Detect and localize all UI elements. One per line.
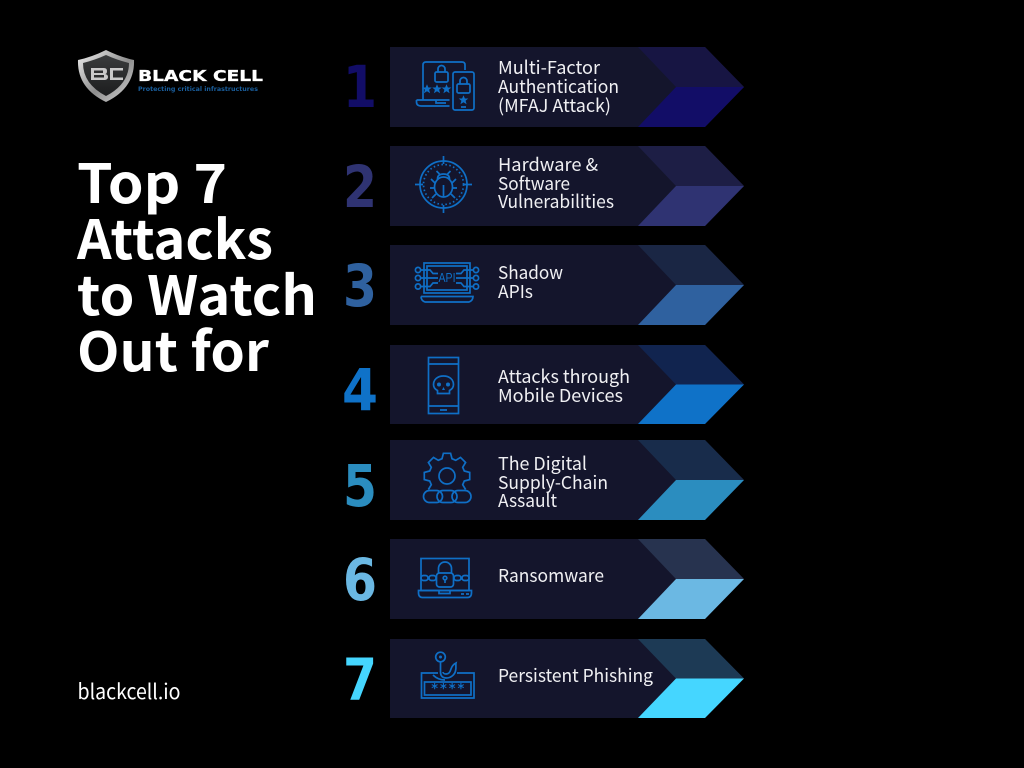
chevron top 7 bbox=[638, 639, 744, 678]
panel 4 bbox=[390, 345, 744, 424]
item 6: Ransomware bbox=[343, 539, 744, 619]
website link: blackcell.io bbox=[78, 676, 180, 706]
chevron bottom 2 bbox=[638, 186, 744, 226]
icon: laptop and phone lock bbox=[416, 62, 474, 110]
panel 2 bbox=[390, 146, 744, 226]
item 7: Persistent Phishing bbox=[343, 639, 744, 718]
title: Out for bbox=[77, 308, 269, 387]
icon: API laptop: API bbox=[438, 271, 456, 285]
icon: locked laptop bbox=[418, 558, 472, 598]
label 4: Attacks through bbox=[498, 363, 630, 389]
icon: gear and chain bbox=[424, 453, 471, 502]
number 3: 3 bbox=[343, 252, 377, 320]
panel 7 bbox=[390, 639, 744, 718]
item 2: Hardware & Software Vulnerabilities bbox=[343, 146, 744, 226]
icon: phone with skull bbox=[428, 358, 458, 414]
logo tagline: Protecting critical infrastructures bbox=[138, 85, 258, 93]
chevron bottom 6 bbox=[638, 579, 744, 619]
icon: API laptop bbox=[415, 263, 479, 302]
label 5: Assault bbox=[498, 487, 557, 513]
chevron top 5 bbox=[638, 440, 744, 480]
number 2: 2 bbox=[343, 153, 377, 221]
number 1: 1 bbox=[343, 53, 377, 121]
icon: bug in target bbox=[415, 156, 472, 213]
number 6: 6 bbox=[343, 546, 377, 614]
number 7: 7 bbox=[343, 646, 377, 714]
chevron bottom 7 bbox=[638, 678, 744, 718]
panel 6 bbox=[390, 539, 744, 619]
chevron bottom 1 bbox=[638, 87, 744, 127]
label 7: Persistent Phishing bbox=[498, 662, 653, 688]
label 2 bbox=[498, 151, 614, 214]
item 3: Shadow APIs bbox=[343, 245, 744, 325]
panel 5 bbox=[390, 440, 744, 520]
logo wordmark: BLACK CELL bbox=[138, 67, 264, 85]
icon: fishing hook password bbox=[422, 652, 474, 698]
label 1: Authentication bbox=[498, 73, 619, 99]
label 6: Ransomware bbox=[498, 562, 604, 588]
icon: fishing hook password: **** bbox=[431, 682, 464, 697]
logo: Black Cell bbox=[78, 50, 264, 102]
icon: shield bbox=[78, 50, 134, 102]
label 4 bbox=[498, 363, 630, 408]
label 1 bbox=[498, 54, 619, 118]
number 4: 4 bbox=[342, 356, 378, 424]
item 5: The Digital Supply-Chain Assault bbox=[343, 440, 744, 520]
label 3: APIs bbox=[498, 278, 533, 304]
title: Top 7 bbox=[77, 140, 227, 219]
chevron top 2 bbox=[638, 146, 744, 186]
item 4: Attacks through Mobile Devices bbox=[342, 345, 744, 424]
chevron top 4 bbox=[638, 345, 744, 384]
label 2: Hardware & bbox=[498, 151, 598, 177]
chevron bottom 3 bbox=[638, 285, 744, 325]
panel 1 bbox=[390, 47, 744, 127]
chevron bottom 5 bbox=[638, 480, 744, 520]
label 2: Vulnerabilities bbox=[498, 188, 614, 214]
label 3 bbox=[498, 259, 563, 304]
label 5: The Digital bbox=[498, 450, 587, 476]
chevron bottom 4 bbox=[638, 384, 744, 424]
label 2: Software bbox=[498, 170, 570, 196]
label 4: Mobile Devices bbox=[498, 382, 623, 408]
title: to Watch bbox=[77, 252, 317, 331]
label 5: Supply-Chain bbox=[498, 469, 608, 495]
item 1: Multi-Factor Authentication bbox=[343, 47, 744, 127]
label 3: Shadow bbox=[498, 259, 563, 285]
label 1: Multi-Factor bbox=[498, 54, 601, 80]
title: Attacks bbox=[76, 196, 273, 275]
panel 3 bbox=[390, 245, 744, 325]
chevron top 6 bbox=[638, 539, 744, 579]
title bbox=[76, 140, 317, 387]
label 5 bbox=[498, 450, 608, 513]
number 5: 5 bbox=[343, 452, 377, 520]
label 1: (MFAJ Attack) bbox=[498, 92, 611, 118]
chevron top 1 bbox=[638, 47, 744, 87]
chevron top 3 bbox=[638, 245, 744, 285]
